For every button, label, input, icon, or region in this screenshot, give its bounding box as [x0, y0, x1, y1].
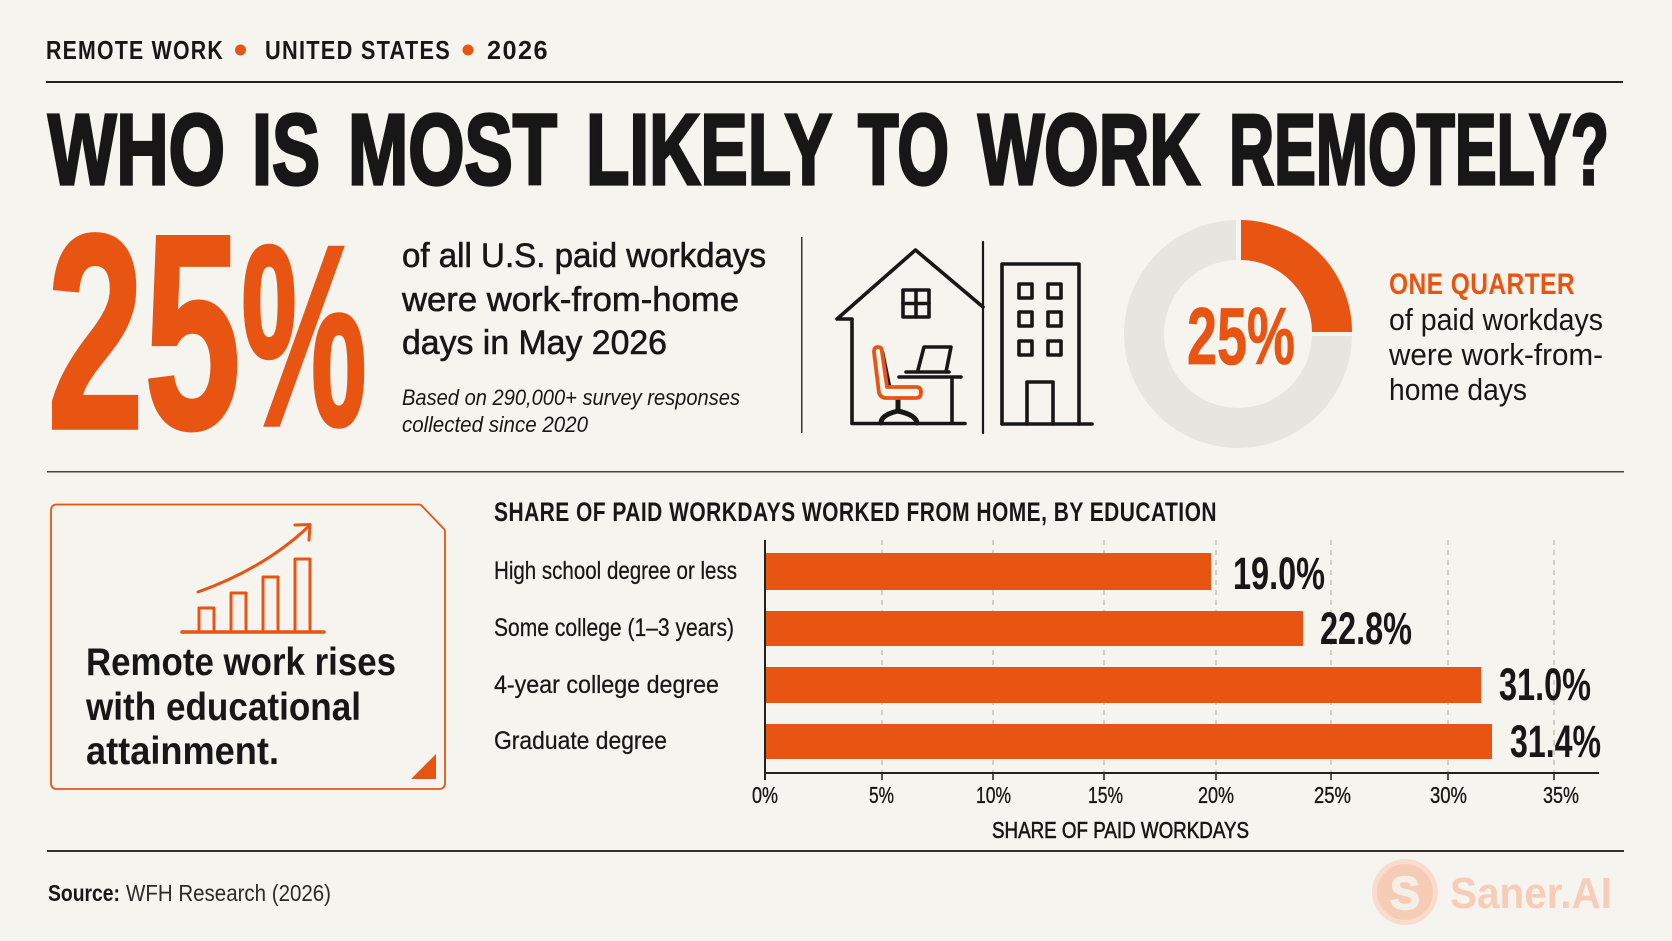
watermark logo: [1372, 859, 1612, 925]
x axis tick labels: 25%: [1314, 782, 1351, 808]
corner triangle: [411, 754, 436, 779]
source: [48, 880, 331, 906]
bar: four-year degree: 31.0%: [1499, 659, 1591, 710]
source: WFH Research (2026): [126, 880, 331, 906]
bar: graduate degree: Graduate degree: [494, 727, 667, 755]
icon: house: [837, 250, 983, 424]
x axis tick labels: 30%: [1430, 782, 1467, 808]
header kicker: [46, 35, 549, 65]
donut caption: home days: [1389, 372, 1527, 407]
title: WORK: [978, 94, 1200, 206]
bar: high school: High school degree or less: [494, 557, 737, 585]
big stat: 25%: %: [241, 191, 367, 480]
x axis tick labels: 0%: [752, 782, 778, 808]
callout text: Remote work rises: [86, 641, 396, 684]
survey note: collected since 2020: [402, 412, 589, 437]
stat description: [401, 237, 766, 362]
x axis tick labels: 20%: [1198, 782, 1234, 808]
icon: rising bar chart with arrow: [182, 524, 324, 632]
panel: callout: [51, 504, 445, 789]
title: WHO: [48, 94, 225, 206]
x axis tick labels: 35%: [1543, 782, 1579, 808]
watermark logo: Saner.AI: [1450, 869, 1612, 918]
bar: high school: [494, 548, 1325, 599]
callout text: [85, 641, 396, 773]
donut chart: 25%: [1187, 292, 1295, 382]
bar: four-year degree: [494, 659, 1591, 710]
title: [48, 94, 1609, 206]
header kicker: 2026: [487, 35, 549, 65]
x axis tick labels: [752, 782, 1579, 808]
bar: some college: 22.8%: [1320, 603, 1412, 654]
title: TO: [858, 94, 949, 206]
title: IS: [252, 94, 320, 206]
icon: orange chair: [874, 347, 921, 423]
donut caption: were work-from-: [1388, 337, 1603, 372]
survey note: Based on 290,000+ survey responses: [402, 385, 740, 410]
chart axes: [764, 540, 1599, 780]
survey note: [402, 385, 740, 437]
x axis title: SHARE OF PAID WORKDAYS: [992, 817, 1249, 843]
source: Source:: [48, 880, 120, 906]
bar: high school: 19.0%: [1233, 548, 1325, 599]
title: LIKELY: [586, 94, 832, 206]
header kicker: UNITED STATES: [265, 35, 451, 65]
bar: some college: [494, 603, 1412, 654]
icon: office building: [1002, 264, 1092, 424]
x axis tick labels: 5%: [869, 782, 894, 808]
x axis tick labels: 10%: [976, 782, 1011, 808]
icon: house with home office and office building: [837, 242, 1092, 433]
bar: graduate degree: [494, 716, 1601, 767]
bar: some college: Some college (1–3 years): [494, 614, 734, 642]
callout text: with educational: [85, 686, 361, 729]
bar: graduate degree: 31.4%: [1510, 716, 1601, 767]
title: MOST: [348, 94, 557, 206]
donut chart: [1124, 220, 1352, 448]
big stat: 25%: 25: [47, 176, 241, 487]
stat description: days in May 2026: [402, 324, 667, 362]
header kicker: REMOTE WORK: [46, 35, 224, 65]
icon: desk and laptop: [899, 347, 961, 423]
donut caption: [1388, 268, 1603, 407]
bar chart: [494, 540, 1601, 843]
callout text: attainment.: [86, 730, 279, 773]
x axis tick labels: 15%: [1088, 782, 1123, 808]
donut caption: of paid workdays: [1389, 302, 1603, 337]
donut caption: ONE QUARTER: [1389, 268, 1575, 301]
watermark logo: S: [1390, 867, 1420, 919]
chart title: SHARE OF PAID WORKDAYS WORKED FROM HOME, BY EDUCATION: [494, 497, 1217, 527]
stat description: were work-from-home: [401, 281, 739, 319]
bar: four-year degree: 4-year college degree: [494, 671, 719, 699]
stat description: of all U.S. paid workdays: [402, 237, 766, 275]
